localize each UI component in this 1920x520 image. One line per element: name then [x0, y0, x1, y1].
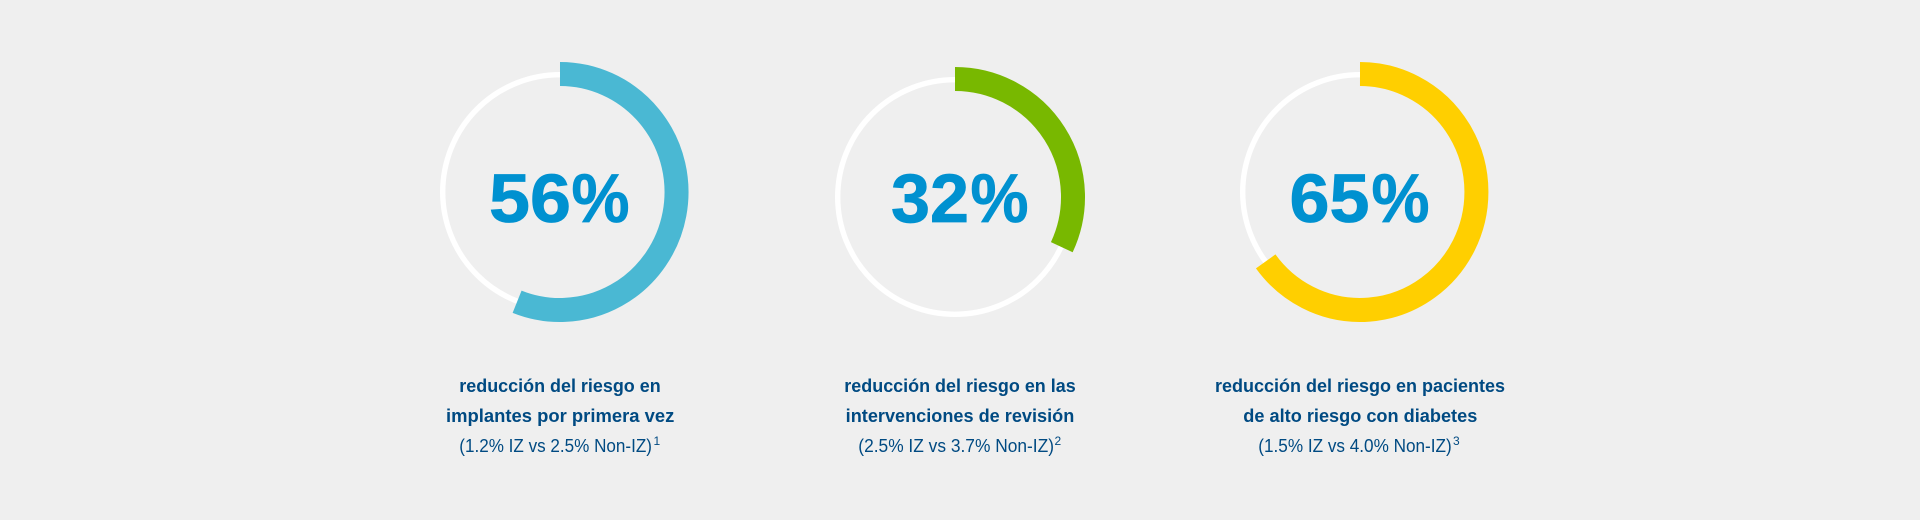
caption: high-risk diabetic patients — [1215, 376, 1505, 456]
value: 56%: % — [572, 160, 630, 237]
caption: revision procedures: (2.5% IZ vs 3.7% Non-IZ) — [858, 436, 1054, 456]
value: 32% — [891, 160, 1028, 237]
panel: 32% revision procedures — [838, 79, 1076, 456]
caption: first-time implants: reducción del riesgo en — [459, 376, 661, 396]
donut chart: 56% — [443, 74, 677, 310]
caption: first-time implants — [446, 376, 674, 456]
caption: revision procedures — [844, 376, 1076, 456]
caption: first-time implants: implantes por primera vez — [446, 406, 674, 426]
caption: first-time implants: (1.2% IZ vs 2.5% Non-IZ) — [459, 436, 652, 456]
value: 65%: 65 — [1290, 160, 1370, 237]
panel: 56% first-time implants — [443, 74, 677, 456]
value: 65%: % — [1372, 160, 1430, 237]
caption: revision procedures: 2 — [1054, 434, 1062, 448]
value: 32%: 32 — [891, 160, 969, 237]
value: 65% — [1290, 160, 1430, 237]
caption: high-risk diabetic patients: reducción del riesgo en pacientes — [1215, 376, 1505, 396]
caption: first-time implants: 1 — [654, 434, 660, 448]
caption: high-risk diabetic patients: 3 — [1453, 434, 1460, 448]
donut chart: 32% — [838, 79, 1073, 314]
panel: 65% high-risk diabetic patients — [1215, 74, 1505, 456]
caption: high-risk diabetic patients: (1.5% IZ vs 4.0% Non-IZ) — [1258, 436, 1452, 456]
caption: high-risk diabetic patients: de alto riesgo con diabetes — [1243, 406, 1477, 426]
donut chart: 65% — [1243, 74, 1477, 310]
value: 56% — [489, 160, 630, 237]
value: 56%: 56 — [489, 160, 571, 237]
value: 32%: % — [970, 160, 1028, 237]
caption: revision procedures: reducción del riesgo en las — [844, 376, 1076, 396]
caption: revision procedures: intervenciones de revisión — [846, 406, 1074, 426]
